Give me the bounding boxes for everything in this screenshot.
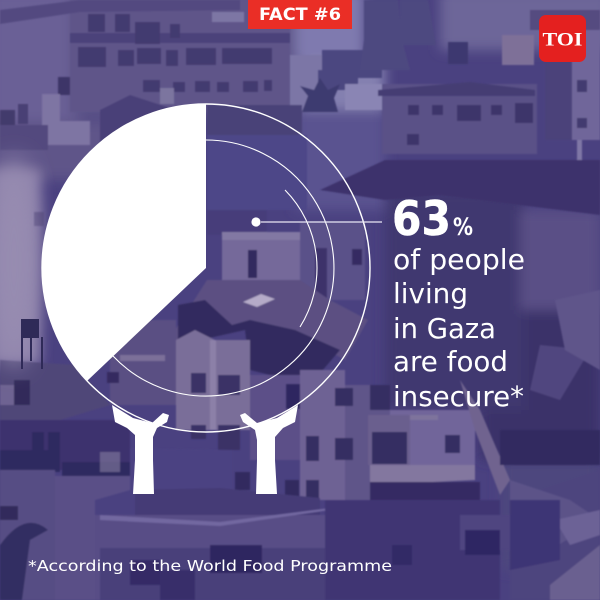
center building — [176, 330, 250, 430]
statistic text: in Gaza — [393, 312, 496, 345]
statistic text: % — [453, 213, 473, 241]
lower left — [0, 360, 110, 420]
inside ring top — [207, 105, 302, 135]
icon: left hand — [112, 405, 169, 494]
pie chart: 63 percent — [42, 104, 370, 432]
icon: TOI logo: TOI — [542, 30, 582, 50]
statistic text: 63 — [392, 192, 451, 247]
tower and palm right of top building — [290, 55, 322, 112]
upper right — [448, 42, 468, 64]
lower right — [325, 500, 500, 600]
middle arc — [113, 140, 334, 396]
statistic text — [392, 192, 525, 413]
left water tower — [21, 319, 43, 369]
fact label: FACT #6 — [259, 5, 341, 25]
fact label — [248, 0, 352, 29]
inner arc — [285, 190, 317, 327]
footnote: *According to the World Food Programme — [28, 557, 392, 575]
statistic text: of people — [393, 243, 525, 276]
statistic text: living — [393, 277, 468, 310]
statistic text: insecure* — [393, 380, 524, 413]
statistic text: are food — [393, 345, 508, 378]
icon: TOI logo — [539, 15, 586, 62]
outer ring — [42, 104, 370, 432]
pointer line — [251, 217, 382, 227]
filled wedge — [42, 104, 206, 381]
icon: right hand — [240, 405, 298, 494]
upper left building — [70, 0, 290, 112]
